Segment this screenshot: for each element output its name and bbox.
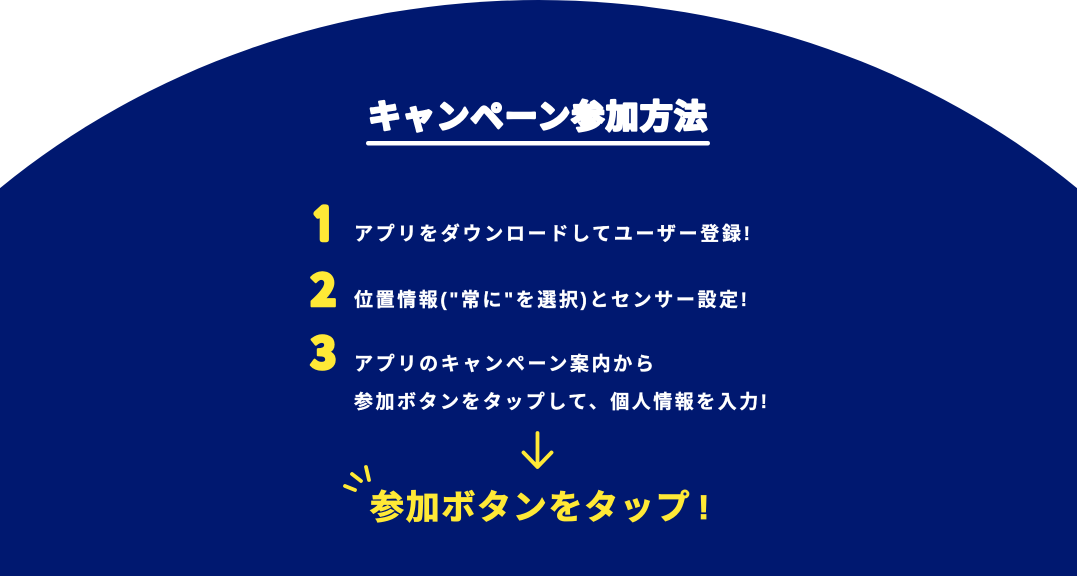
icon: sparkle lines: [345, 467, 369, 490]
step 3 text line 1: アプリのキャンペーン案内から: [354, 353, 654, 375]
step 3 text line 2: 参加ボタンをタップして、個人情報を入力!: [354, 391, 767, 413]
step 2 number: 2: [310, 255, 337, 319]
step 1 text: アプリをダウンロードしてユーザー登録!: [354, 222, 750, 245]
heading underline: [366, 141, 710, 146]
call to action: tap the participate button: !: [698, 489, 711, 527]
step 1 number: 1: [310, 203, 337, 247]
step 2 text: 位置情報("常に"を選択)とセンサー設定!: [354, 289, 747, 311]
heading: campaign participation method: キャンペーン参加方法: [368, 98, 707, 135]
icon: down arrow: [524, 433, 552, 467]
step 3 number: 3: [310, 318, 337, 382]
call to action: tap the participate button: 参加ボタンをタップ: [370, 489, 691, 527]
